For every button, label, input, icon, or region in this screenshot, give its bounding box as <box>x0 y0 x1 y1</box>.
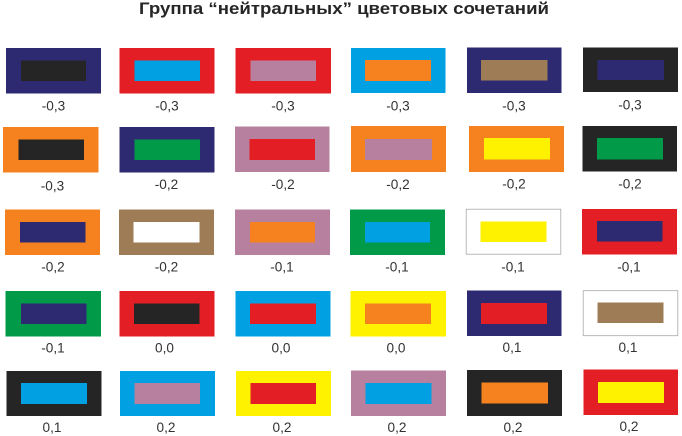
swatch: pink with red, -0,2 <box>235 126 330 192</box>
swatch: red with cyan, -0,3 <box>120 48 214 114</box>
swatch: navy with green, -0,2: -0,2 <box>155 177 178 192</box>
swatch: navy with black, -0,3: -0,3 <box>42 98 65 114</box>
swatch: navy with tan, -0,3 <box>467 48 562 114</box>
swatch: orange with pink, -0,2: -0,2 <box>386 177 410 192</box>
swatch: yellow with orange, 0,0: 0,0 <box>387 340 406 356</box>
swatch: orange with yellow, -0,2 <box>469 126 564 192</box>
swatch: black with navy, -0,3 <box>583 48 678 112</box>
swatch: red with cyan, -0,3: -0,3 <box>155 98 179 114</box>
swatch: black with navy, -0,3: -0,3 <box>618 98 642 112</box>
swatch: red with yellow, 0,2 <box>584 370 678 434</box>
swatch: red with navy, -0,1 <box>582 209 677 274</box>
swatch: navy with green, -0,2 <box>120 127 214 192</box>
swatch: pink with orange, -0,1 <box>235 210 330 274</box>
swatch: green with cyan, -0,1 <box>350 210 445 274</box>
swatch: black with cyan, 0,1: 0,1 <box>43 420 61 435</box>
swatch: pink with cyan, 0,2: 0,2 <box>388 420 406 435</box>
swatch: yellow with red, 0,2 <box>236 371 331 435</box>
swatch: red with navy, -0,1: -0,1 <box>617 260 641 274</box>
swatch: orange with navy, -0,2 <box>5 210 100 274</box>
swatch: red with pink, -0,3 <box>236 48 331 114</box>
swatch: white with yellow, -0,1: -0,1 <box>501 260 525 274</box>
swatch: green with cyan, -0,1: -0,1 <box>385 260 409 274</box>
swatch: pink with cyan, 0,2 <box>351 370 446 435</box>
swatch: pink with orange, -0,1: -0,1 <box>270 260 294 274</box>
swatch: white with tan, 0,1: 0,1 <box>619 340 637 355</box>
swatch: red with black, 0,0: 0,0 <box>155 340 174 356</box>
swatch: red with yellow, 0,2: 0,2 <box>620 419 638 434</box>
swatch: black with orange, 0,2 <box>467 370 562 435</box>
swatch: cyan with pink, 0,2 <box>120 371 215 435</box>
swatch: orange with navy, -0,2: -0,2 <box>41 260 65 274</box>
swatch: green with navy, -0,1: -0,1 <box>41 340 65 356</box>
swatch: black with green, -0,2 <box>582 126 677 192</box>
swatch: navy with red, 0,1 <box>467 290 562 355</box>
swatch: tan with white, -0,2: -0,2 <box>155 260 178 274</box>
swatch: cyan with red, 0,0 <box>236 291 330 356</box>
swatch: pink with red, -0,2: -0,2 <box>271 177 295 192</box>
swatch: green with navy, -0,1 <box>6 291 101 356</box>
swatch: red with pink, -0,3: -0,3 <box>271 98 295 114</box>
swatch: navy with black, -0,3 <box>6 48 101 114</box>
swatch: orange with black, -0,3: -0,3 <box>41 178 64 194</box>
swatch: yellow with red, 0,2: 0,2 <box>273 420 291 435</box>
swatch: navy with tan, -0,3: -0,3 <box>502 98 526 114</box>
swatch: orange with black, -0,3 <box>3 127 98 194</box>
swatch: navy with red, 0,1: 0,1 <box>503 340 521 355</box>
swatch: cyan with orange, -0,3: -0,3 <box>386 98 410 114</box>
swatch: white with yellow, -0,1 <box>466 209 561 274</box>
swatch: orange with pink, -0,2 <box>351 126 446 192</box>
swatch: white with tan, 0,1 <box>583 291 678 355</box>
swatch: orange with yellow, -0,2: -0,2 <box>502 176 526 192</box>
swatch: cyan with orange, -0,3 <box>351 48 446 114</box>
swatch: red with black, 0,0 <box>120 291 214 356</box>
swatch: black with cyan, 0,1 <box>6 371 102 435</box>
swatch: cyan with pink, 0,2: 0,2 <box>157 420 175 435</box>
swatch: cyan with red, 0,0: 0,0 <box>272 340 291 356</box>
swatch: black with orange, 0,2: 0,2 <box>504 420 522 435</box>
swatch: black with green, -0,2: -0,2 <box>618 176 642 192</box>
swatch: yellow with orange, 0,0 <box>350 291 446 356</box>
swatch: tan with white, -0,2 <box>119 210 214 274</box>
